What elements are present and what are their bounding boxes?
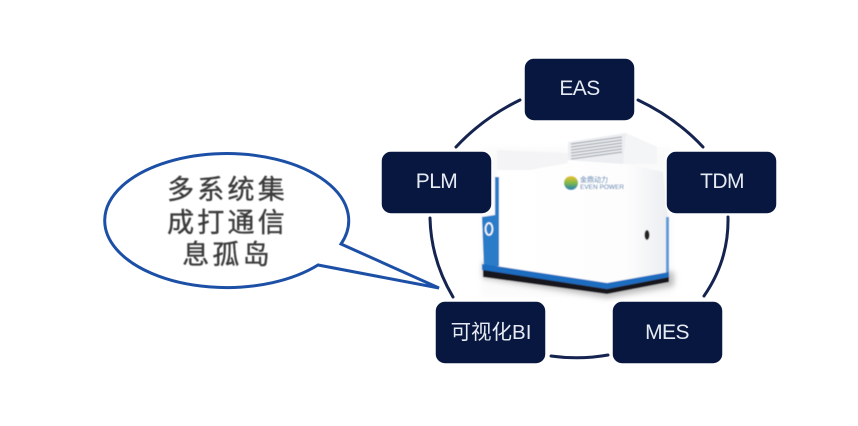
- black skid: [483, 270, 669, 294]
- machine body: [497, 150, 668, 284]
- node: EAS: EAS: [559, 77, 600, 100]
- rooftop cooling unit: [568, 133, 657, 164]
- side vent: [644, 230, 650, 240]
- bubble text: 息孤岛: [182, 240, 273, 270]
- node: MES: [612, 301, 723, 364]
- brand name: EVEN POWER: [580, 184, 624, 191]
- machine backdrop: [482, 148, 672, 296]
- node: PLM: PLM: [416, 170, 457, 193]
- blue left panel: [482, 177, 499, 268]
- brand logo: [564, 176, 578, 190]
- brand name: 金鼎动力: [580, 175, 608, 184]
- blue right edge: [666, 217, 669, 275]
- node: visual BI: [435, 301, 546, 364]
- node: PLM: [381, 151, 492, 214]
- node: visual BI: 可视化BI: [451, 321, 531, 344]
- icon: power generator unit: [482, 133, 674, 298]
- speech bubble: [105, 154, 439, 288]
- ring connecting the five systems: [430, 100, 728, 358]
- node: TDM: [666, 151, 777, 214]
- bubble text: [167, 175, 288, 270]
- blue base stripe: [482, 264, 669, 289]
- rear body panel: [497, 150, 568, 170]
- bubble outline: [105, 154, 439, 288]
- machine shadow: [483, 262, 674, 298]
- bubble text: 成打通信: [167, 208, 288, 238]
- bubble text: 多系统集: [167, 175, 288, 205]
- node: EAS: [524, 58, 635, 121]
- node: MES: MES: [645, 321, 689, 344]
- brand name: [580, 175, 624, 191]
- node: TDM: TDM: [700, 170, 744, 193]
